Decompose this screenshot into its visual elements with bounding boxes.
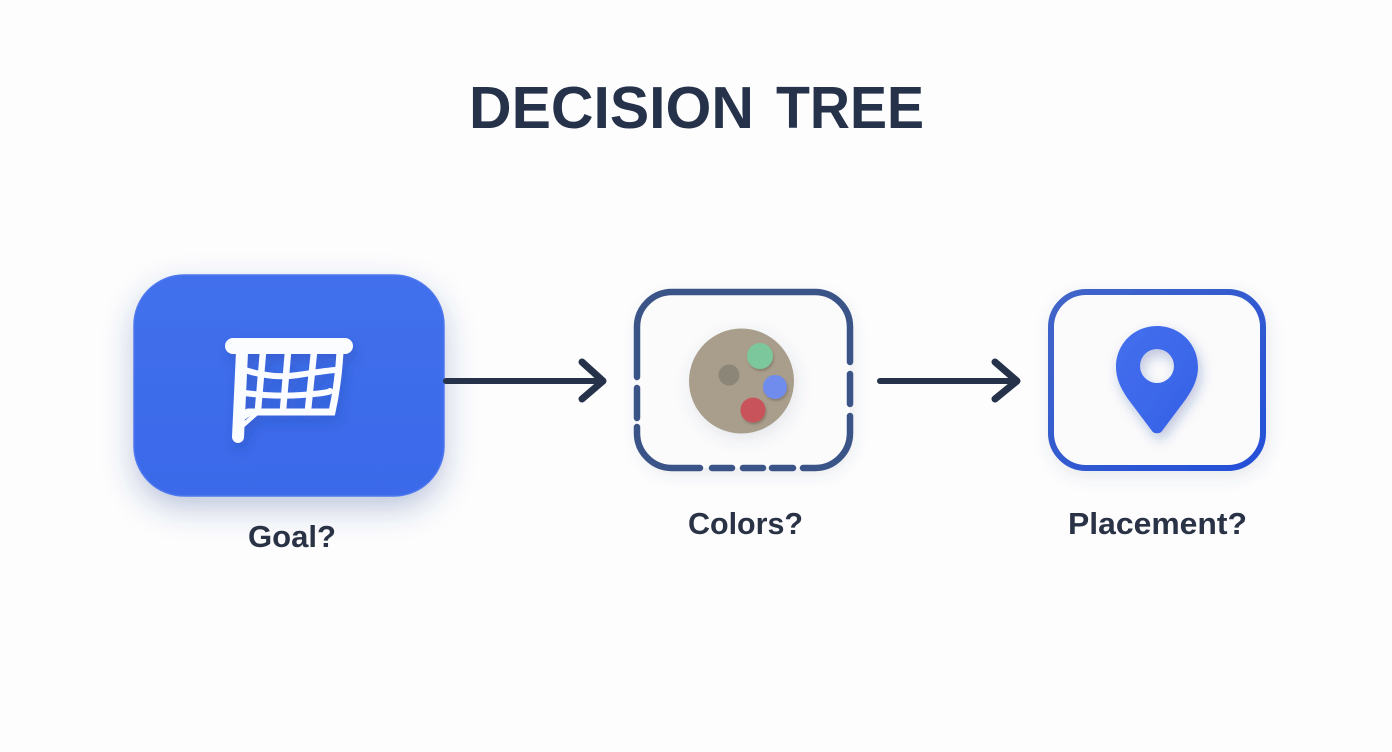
title — [469, 75, 924, 141]
icon: palette — [689, 328, 794, 434]
node: colors — [637, 292, 850, 468]
title: TREE — [776, 75, 924, 141]
arrow: colors to placement — [880, 362, 1017, 399]
node: placement — [1051, 292, 1263, 468]
panel: placement box — [1051, 292, 1263, 468]
node: goal — [134, 275, 444, 496]
panel: colors box fill — [637, 292, 850, 468]
label: colors: Colors? — [688, 506, 803, 541]
title: DECISION — [469, 75, 754, 141]
panel: dashed border — [637, 292, 850, 468]
panel: goal box — [134, 275, 444, 496]
label: goal: Goal? — [248, 519, 336, 554]
icon: goal net — [233, 346, 345, 437]
arrow: goal to colors — [446, 362, 603, 399]
icon: map pin — [1116, 326, 1198, 433]
label: placement: Placement? — [1068, 506, 1247, 541]
